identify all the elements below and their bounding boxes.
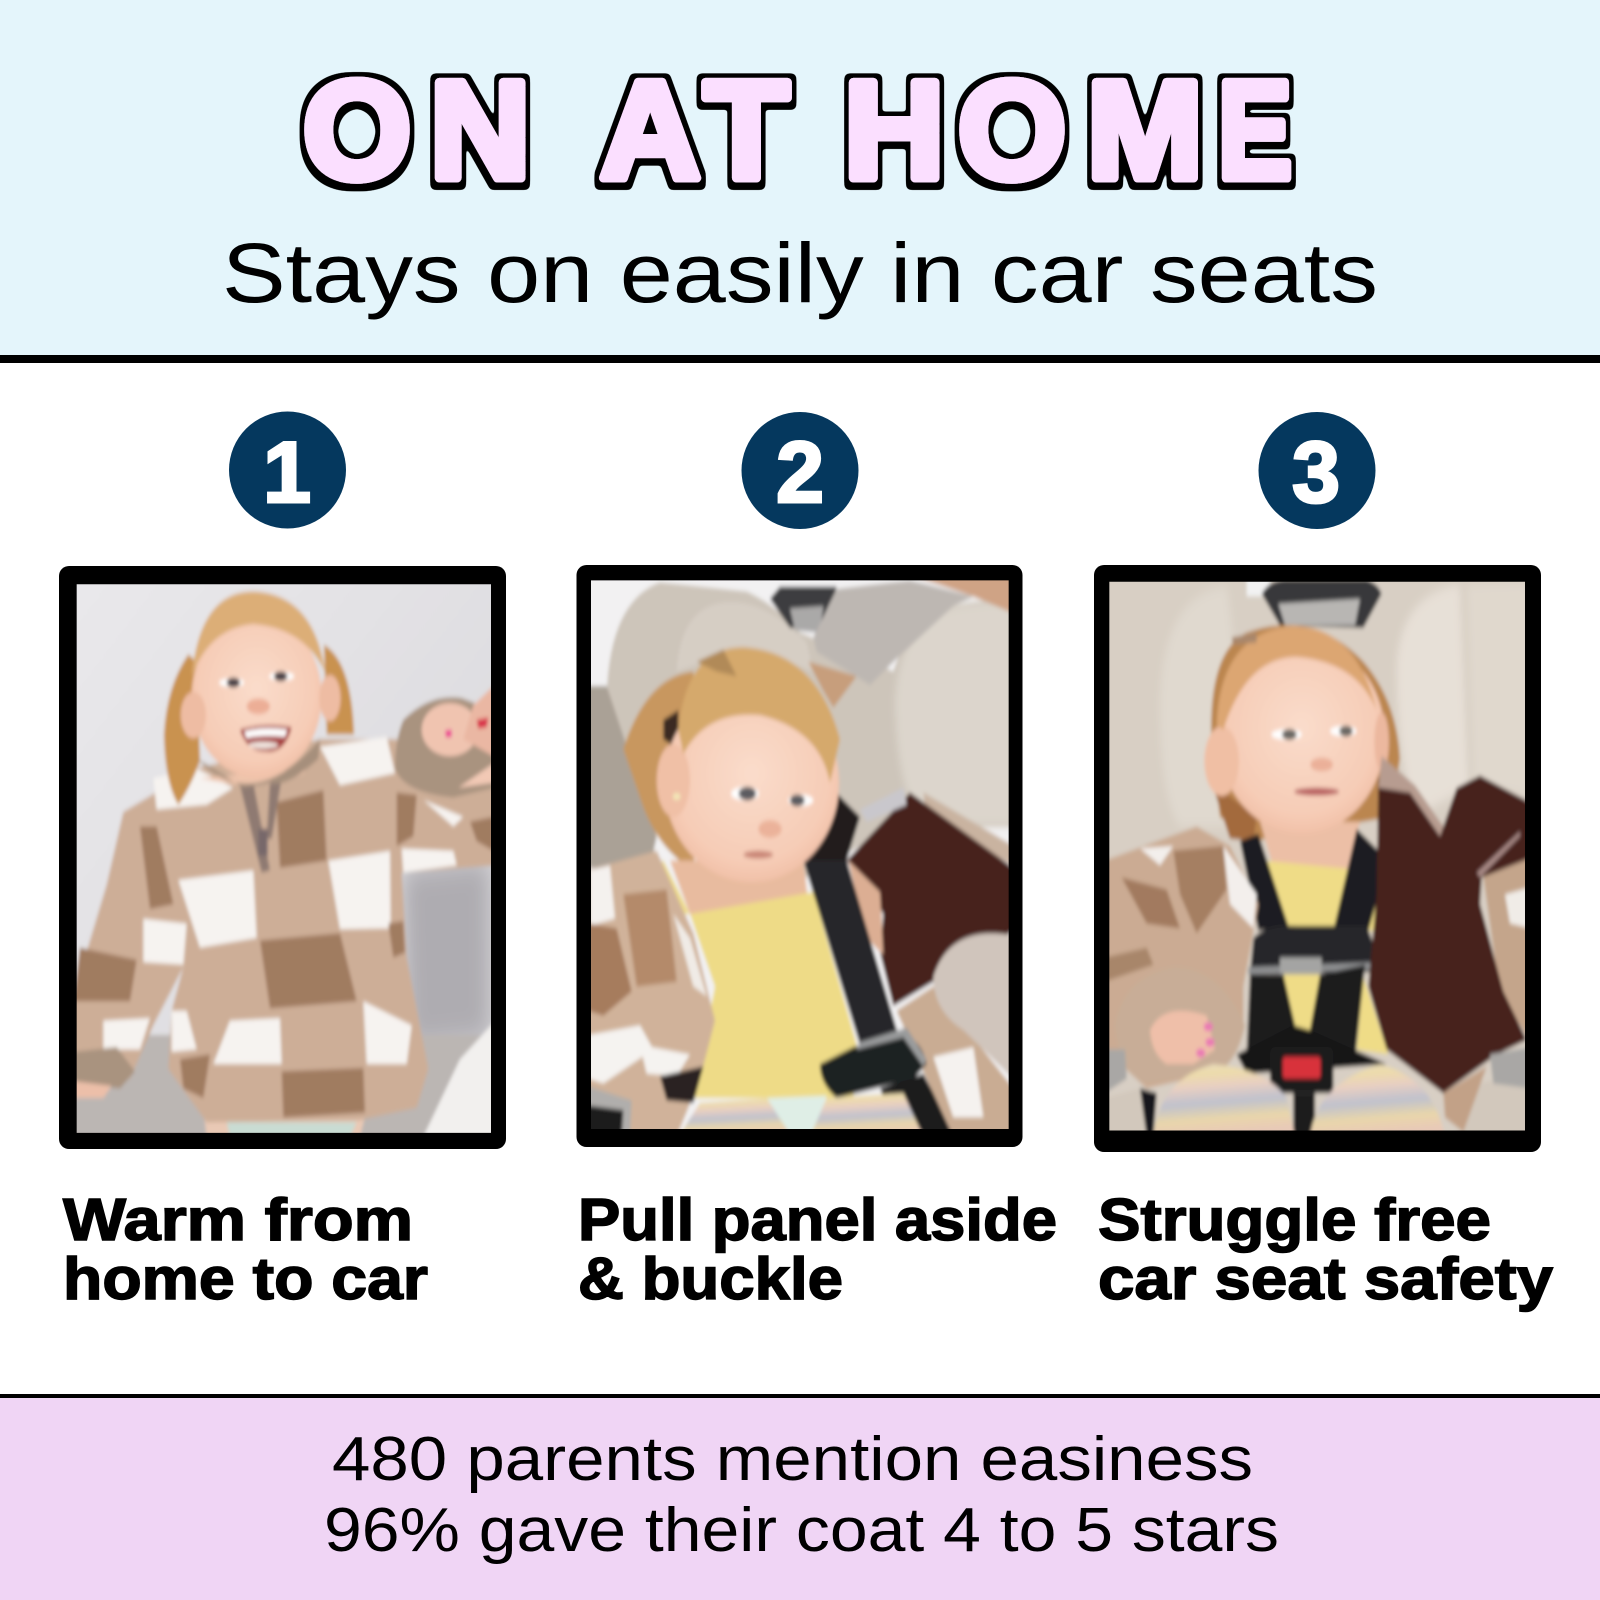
handle xyxy=(770,587,837,628)
buckle xyxy=(1270,1047,1333,1093)
neck xyxy=(1260,822,1360,877)
zipper xyxy=(240,783,270,873)
lower seat xyxy=(1468,1085,1524,1130)
face xyxy=(192,615,322,778)
seat xyxy=(606,582,1013,885)
subtitle: Stays on easily in car seats xyxy=(222,226,1378,320)
step 2 number badge: 2 xyxy=(776,425,824,521)
caption 2: Pull panel aside xyxy=(578,1187,1057,1253)
belt xyxy=(803,783,860,860)
hand and glove xyxy=(808,662,857,708)
cup xyxy=(591,1086,632,1129)
step 2 number badge xyxy=(742,412,858,529)
panel: photo 1, child in plaid coat xyxy=(59,566,506,1149)
caption 3: Struggle free xyxy=(1098,1187,1491,1253)
step 3 number badge: 3 xyxy=(1292,425,1340,521)
title: ON xyxy=(303,53,530,208)
brown coat and arm xyxy=(923,793,1013,865)
brown coat xyxy=(1482,856,1525,1036)
fuzzy coat left xyxy=(587,851,715,1137)
handle xyxy=(1262,579,1382,628)
footer band xyxy=(0,1394,1600,1600)
fuzzy coat left xyxy=(1105,827,1258,1088)
footer statistics text xyxy=(324,1425,1279,1565)
footer statistics text: 480 parents mention easiness xyxy=(332,1425,1253,1494)
caption 2 xyxy=(578,1187,1057,1312)
caption 1: home to car xyxy=(63,1246,428,1312)
hair xyxy=(623,671,700,870)
header band xyxy=(0,0,1600,363)
title xyxy=(303,53,1292,208)
tights xyxy=(768,1092,828,1129)
step 1 number badge: 1 xyxy=(263,425,311,521)
panel: photo 3, child buckled with harness xyxy=(1094,565,1541,1152)
buckle xyxy=(820,1035,927,1098)
tights xyxy=(1153,1064,1295,1137)
caption 2: & buckle xyxy=(578,1246,843,1312)
caption 3: car seat safety xyxy=(1098,1246,1553,1312)
hair xyxy=(164,645,354,805)
cuff and hands xyxy=(395,697,493,797)
face xyxy=(668,712,841,880)
step 1 number badge xyxy=(229,412,346,528)
top and harness xyxy=(1263,860,1390,931)
step 3 number badge xyxy=(1258,412,1376,529)
cuff and hand xyxy=(1224,1024,1245,1067)
caption 3 xyxy=(1098,1187,1553,1312)
caption 1 xyxy=(63,1187,428,1312)
title: HOM xyxy=(844,53,1203,208)
right lower coat and mitt xyxy=(897,987,1013,1137)
hair xyxy=(1211,625,1400,841)
panel: photo 2, child in car seat with belt xyxy=(576,565,1022,1147)
title: E xyxy=(1218,53,1292,208)
face xyxy=(1223,654,1384,826)
title: AT xyxy=(600,53,789,208)
caption 1: Warm from xyxy=(63,1187,413,1253)
coat body xyxy=(73,739,493,1122)
footer statistics text: 96% gave their coat 4 to 5 stars xyxy=(324,1496,1279,1565)
neck and top xyxy=(670,860,808,914)
